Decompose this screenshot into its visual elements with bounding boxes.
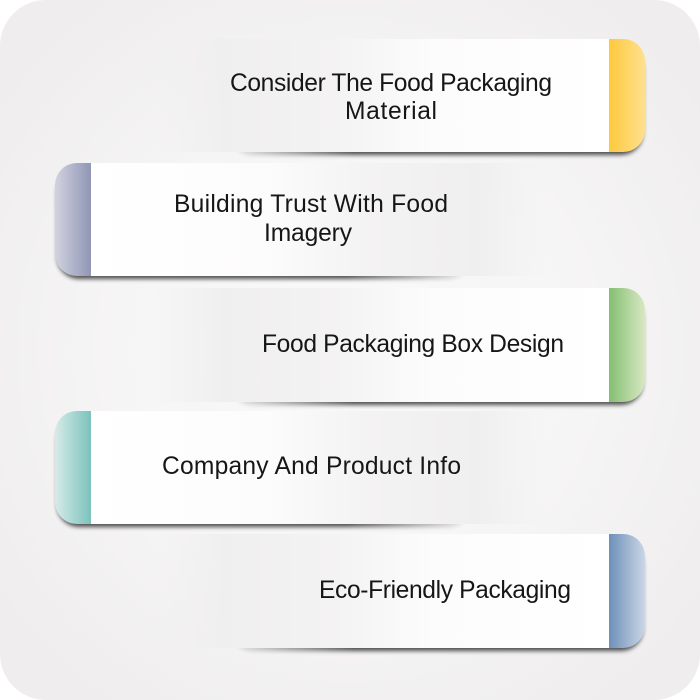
panel: Food Packaging Box Design — [240, 288, 646, 408]
label: Consider The Food Packaging — [230, 70, 552, 97]
accent cap: yellow — [609, 39, 645, 152]
label — [174, 191, 448, 247]
accent cap: green — [609, 288, 645, 402]
accent cap: blue — [609, 534, 645, 648]
label — [230, 70, 552, 125]
accent cap: teal — [55, 411, 91, 524]
label: Food Packaging Box Design — [262, 331, 564, 358]
panel: Company And Product Info — [54, 411, 460, 530]
panel: Eco-Friendly Packaging — [240, 534, 646, 654]
label: Building Trust With Food — [174, 191, 448, 218]
label: Eco-Friendly Packaging — [319, 577, 571, 604]
accent cap: slate — [55, 163, 91, 276]
label: Material — [345, 98, 437, 125]
label: Company And Product Info — [162, 453, 461, 480]
panel: Building Trust With Food Imagery — [54, 163, 460, 282]
panel: Consider The Food Packaging Material — [231, 39, 646, 158]
label: Imagery — [264, 220, 353, 247]
